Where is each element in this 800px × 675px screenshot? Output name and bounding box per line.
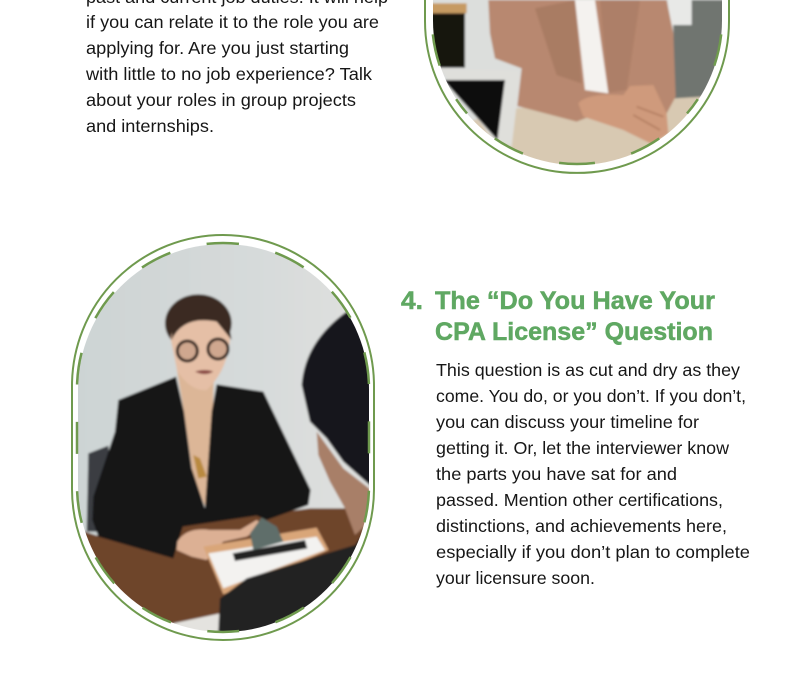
text block: work experience answer: applying for. Are you just starting — [86, 38, 349, 58]
text block: work experience answer: if you can relate it to the role you are — [86, 12, 379, 32]
heading: question 4: CPA License” Question — [435, 318, 713, 346]
text block: CPA license answer: your licensure soon. — [436, 568, 595, 588]
text block: work experience answer: with little to no job experience? Talk — [85, 64, 372, 84]
outer ring — [425, 0, 729, 173]
man in foreground — [317, 432, 373, 535]
text block: work experience answer: and internships. — [86, 116, 214, 136]
outer ring — [72, 235, 374, 640]
clipboard — [203, 528, 329, 594]
text block: CPA license answer: the parts you have sat for and — [436, 464, 677, 484]
clip and crystal — [233, 540, 307, 561]
text block: CPA license answer: especially if you don’t plan to complete — [436, 542, 750, 562]
text block: CPA license answer: come. You do, or you don’t. If you don’t, — [436, 386, 746, 406]
jacket — [92, 377, 311, 558]
text block: CPA license answer: you can discuss your timeline for — [436, 412, 699, 432]
text block: CPA license answer: getting it. Or, let the interviewer know — [436, 438, 729, 458]
photo frame: interview with woman in black blazer — [72, 235, 374, 640]
dashed inner ring right — [577, 0, 722, 164]
chair — [87, 446, 113, 532]
heading: question 4: 4. — [401, 287, 423, 315]
hands — [177, 520, 263, 560]
text block: work experience answer: about your roles in group projects — [86, 90, 356, 110]
text block: CPA license answer — [436, 360, 750, 588]
text block: CPA license answer: This question is as cut and dry as they — [436, 360, 740, 380]
photo frame: candidate in tan blazer at desk — [425, 0, 730, 180]
chest and neck — [177, 368, 214, 508]
photo: tan blazer with clasped hands — [433, 0, 722, 164]
text block: work experience answer — [85, 0, 388, 136]
head of woman — [164, 293, 233, 340]
heading: question 4: The “Do You Have Your — [435, 287, 715, 315]
text block: CPA license answer: distinctions, and achievements here, — [436, 516, 727, 536]
dashed inner ring — [77, 243, 369, 632]
photo: woman in glasses across the table — [73, 238, 373, 638]
text block: CPA license answer: passed. Mention other certifications, — [436, 490, 723, 510]
table — [85, 506, 364, 624]
heading: question 4 — [401, 287, 715, 346]
dashed inner ring left — [432, 0, 577, 164]
